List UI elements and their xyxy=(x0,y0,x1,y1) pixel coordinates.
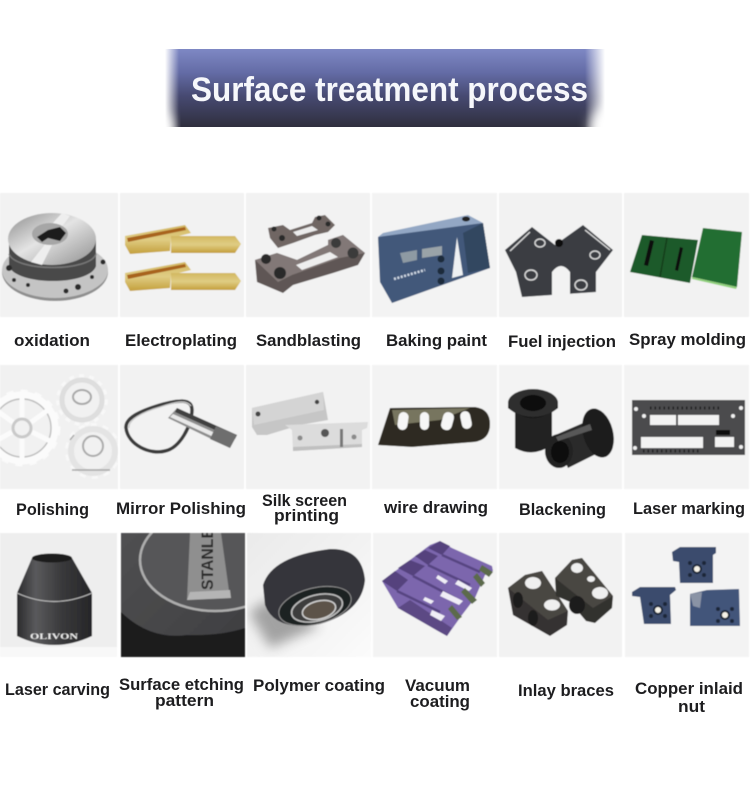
label: surface etching pattern xyxy=(119,675,244,710)
label: vacuum coating xyxy=(405,676,470,711)
label: silk screen printing xyxy=(262,491,347,525)
label: spray molding: Spray molding xyxy=(629,330,746,349)
tile: surface etching pattern: STANLE xyxy=(198,528,217,590)
label: copper inlaid nut: Copper inlaid xyxy=(635,679,743,698)
label: baking paint: Baking paint xyxy=(386,331,487,350)
label: vacuum coating: Vacuum xyxy=(405,676,470,695)
label: wire drawing: wire drawing xyxy=(383,498,488,517)
label: polymer coating: Polymer coating xyxy=(253,676,385,695)
label: inlay braces: Inlay braces xyxy=(518,681,614,700)
label: polishing: Polishing xyxy=(16,500,89,519)
label: laser carving: Laser carving xyxy=(5,680,110,699)
tile: surface etching pattern xyxy=(120,532,246,658)
label: blackening: Blackening xyxy=(519,500,606,519)
label: copper inlaid nut xyxy=(635,679,743,716)
tile: vacuum coating xyxy=(373,533,497,657)
tile: laser carving: OLIVON xyxy=(30,632,78,641)
label: fuel injection: Fuel injection xyxy=(508,332,616,351)
title banner xyxy=(166,49,604,127)
tile: laser carving xyxy=(0,533,117,657)
heading: Surface treatment process xyxy=(191,71,588,109)
tile: fuel injection xyxy=(499,193,622,317)
tile: sandblasting xyxy=(246,193,370,317)
tile: polishing xyxy=(0,365,119,489)
label: sandblasting: Sandblasting xyxy=(256,331,361,350)
tile: blackening xyxy=(499,365,622,489)
label: electroplating: Electroplating xyxy=(125,331,237,350)
tile: baking paint xyxy=(372,193,497,317)
tile: polymer coating xyxy=(247,533,371,657)
tile: silk screen printing xyxy=(246,365,370,489)
label: silk screen printing: printing xyxy=(274,506,339,525)
label: silk screen printing: Silk screen xyxy=(262,491,347,510)
tile: inlay braces xyxy=(499,533,622,657)
tile: spray molding xyxy=(624,193,749,317)
tile: copper inlaid nut xyxy=(625,533,749,657)
tile: mirror polishing xyxy=(120,365,244,489)
label: surface etching pattern: pattern xyxy=(155,691,214,710)
label: laser marking: Laser marking xyxy=(633,499,745,518)
label: surface etching pattern: Surface etching xyxy=(119,675,244,694)
tile: oxidation xyxy=(0,193,118,317)
label: copper inlaid nut: nut xyxy=(678,697,705,716)
tile: laser marking xyxy=(624,365,749,489)
tile: electroplating xyxy=(120,193,244,317)
label: oxidation: oxidation xyxy=(14,331,90,350)
tile: wire drawing xyxy=(372,365,497,489)
label: mirror polishing: Mirror Polishing xyxy=(116,499,246,518)
label: vacuum coating: coating xyxy=(410,692,470,711)
